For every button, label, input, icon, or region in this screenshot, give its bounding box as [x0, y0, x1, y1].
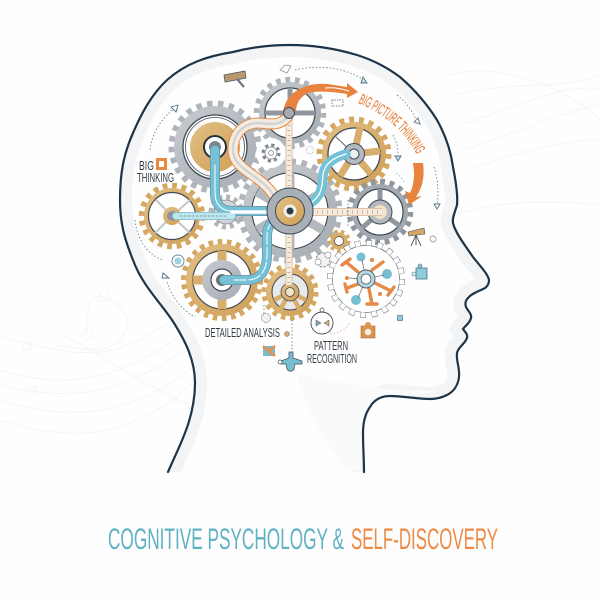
- icon: blue ring node: [172, 255, 184, 267]
- icon: capsule in circle: [311, 308, 333, 334]
- icon: small molecule: [306, 146, 314, 154]
- gear: left gold: [142, 186, 202, 246]
- gear: centre large gray: [241, 162, 339, 260]
- label: big thinking: THINKING: [137, 170, 174, 185]
- icon: orange puzzle: [156, 158, 167, 170]
- gear: top gray: [257, 80, 323, 146]
- head silhouette: [120, 45, 489, 472]
- inner head band: [120, 45, 489, 472]
- icon: dotted chip: [332, 100, 343, 106]
- pipe: gear one to centre: [215, 150, 272, 211]
- gear: right lower gray: [350, 182, 410, 242]
- pipe: centre to right gold gear: [302, 154, 346, 207]
- icon: blue wrench node: [278, 352, 302, 371]
- label: big picture thinking: BIG PICTURE THINKING: [358, 94, 425, 154]
- icon: blue puzzle piece: [412, 264, 427, 279]
- label: pattern recognition: RECOGNITION: [307, 352, 357, 366]
- neck shadow: [296, 372, 440, 470]
- blue pipes: [176, 150, 346, 280]
- icon: orange puzzle piece: [361, 322, 375, 338]
- centre hub: [267, 188, 313, 234]
- label: pattern recognition: [307, 339, 357, 366]
- icon: telescope: [408, 228, 425, 246]
- gear: large bottom gold: [184, 242, 260, 318]
- dashed guide arrows: [135, 67, 438, 352]
- cream ruler connectors: [289, 120, 382, 285]
- gear: white cluster: [315, 252, 331, 267]
- gear: pattern recognition outline gear: [330, 243, 402, 315]
- pipe: left gear bar: [176, 212, 232, 220]
- gear hub: [344, 144, 364, 164]
- orange spokes: [342, 259, 394, 304]
- big picture arrow top: [283, 83, 358, 118]
- head outline: [120, 45, 489, 472]
- icon: small orange teal puzzle: [263, 346, 275, 356]
- big picture arrow right: [405, 163, 424, 205]
- teal drops: [356, 252, 366, 262]
- icon: small gray gear node: [262, 314, 270, 322]
- pipe: bottom gear up to centre: [224, 217, 280, 280]
- gear: bottom small gold: [264, 266, 316, 318]
- label: detailed analysis: DETAILED ANALYSIS: [205, 325, 280, 340]
- gold disc: [190, 122, 240, 172]
- title: COGNITIVE PSYCHOLOGY &: [108, 523, 344, 556]
- faint background network lines: [0, 71, 600, 433]
- orange S connector: [233, 115, 289, 196]
- label: pattern recognition: PATTERN: [314, 339, 348, 353]
- icon: blue square: [398, 316, 402, 320]
- gear: tiny white centre top: [256, 138, 286, 168]
- arrowheads: [162, 77, 440, 278]
- gear: right gold: [320, 120, 388, 188]
- gear: small gold connector: [330, 232, 348, 250]
- label: big thinking: BIG: [139, 158, 154, 173]
- ruler on pipe: [232, 210, 266, 214]
- icon: hammer: [224, 71, 246, 87]
- gear: top left large gray: [172, 104, 258, 190]
- label: big thinking: [137, 158, 174, 185]
- icon: small gold node: [284, 332, 290, 336]
- icon: sparkle outline: [280, 65, 291, 73]
- gear: small gray behind pipes: [211, 197, 241, 227]
